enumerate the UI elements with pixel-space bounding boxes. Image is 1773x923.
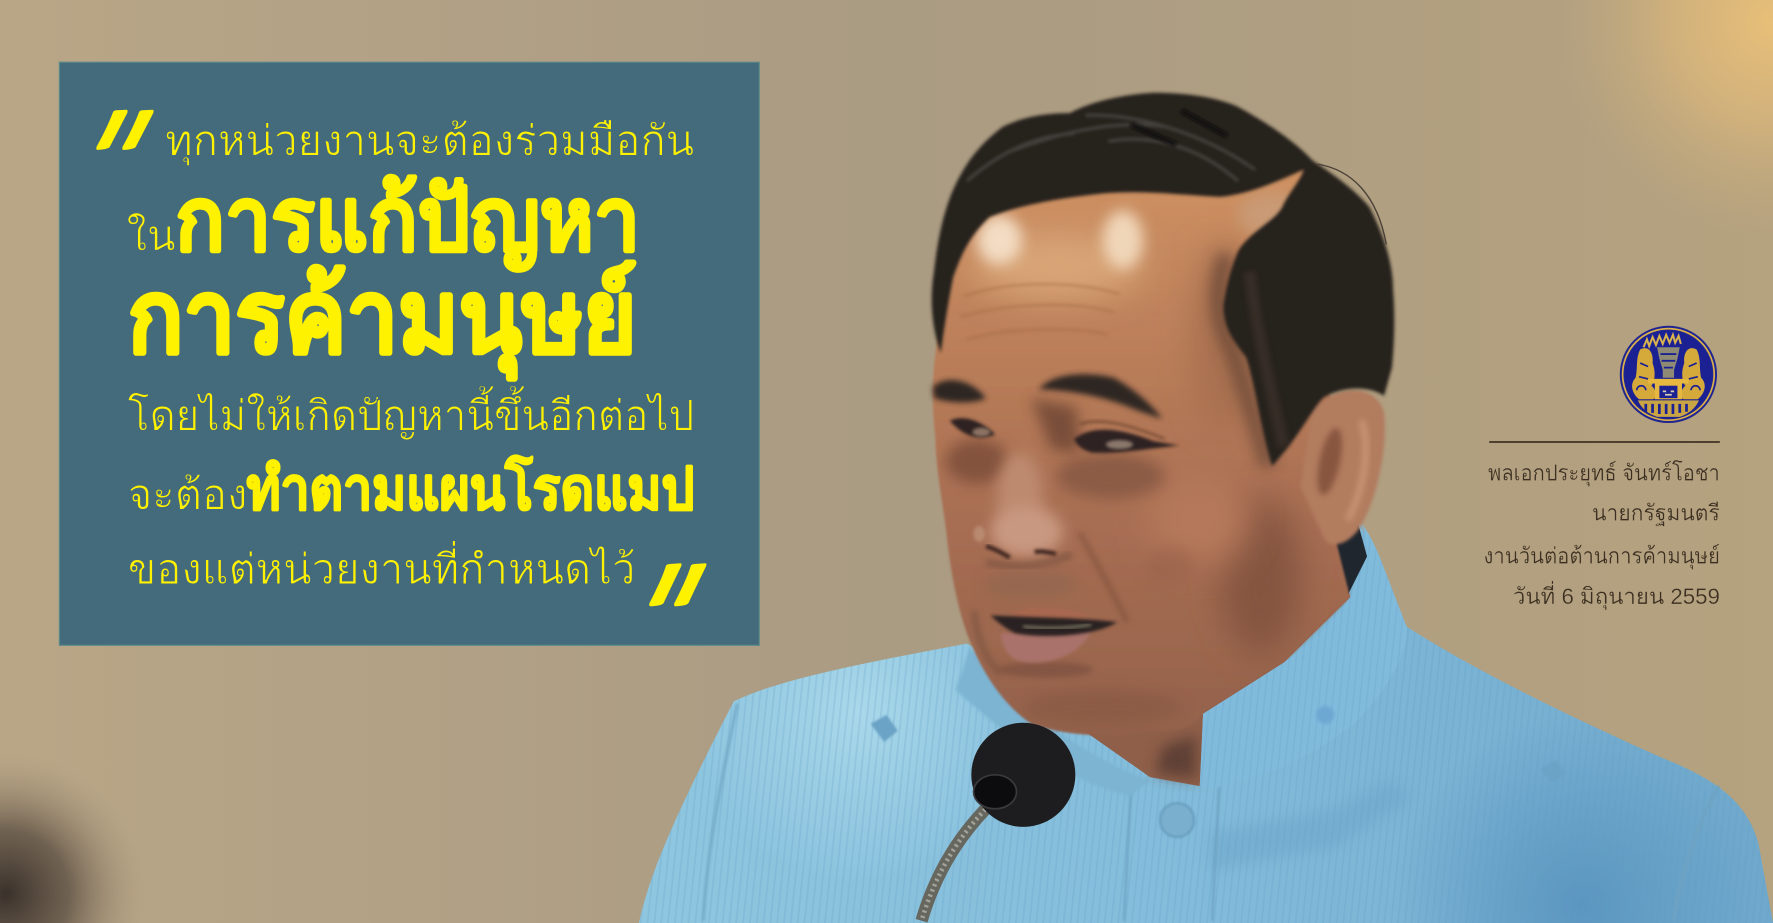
icon: government seal: [1620, 326, 1717, 423]
quote line 3: การค้ามนุษย์: [128, 260, 637, 380]
icon: opening quote mark: [96, 110, 154, 150]
neck: [1074, 532, 1350, 786]
quote line 4: โดยไม่ให้เกิดปัญหานี้ขึ้นอีกต่อไป: [128, 385, 694, 440]
speaker title: นายกรัฐมนตรี: [1592, 500, 1720, 526]
eyes: [950, 418, 1179, 453]
event date: วันที่ 6 มิถุนายน 2559: [1513, 580, 1720, 610]
quote line 5: จะต้อง: [128, 471, 247, 518]
collar dark lining: [1327, 519, 1367, 597]
face: [933, 164, 1350, 735]
seal: bottom inscription band: [1638, 400, 1699, 417]
hair: [932, 93, 1394, 466]
microphone: [922, 723, 1075, 921]
seal: right guardian lion: [1681, 348, 1705, 399]
seal: left guardian lion: [1632, 348, 1656, 399]
collar: [1200, 517, 1407, 788]
eyebrows: [933, 374, 1162, 419]
speaker name: พลเอกประยุทธ์ จันทร์โอชา: [1488, 460, 1720, 487]
quote line 6: ของแต่หน่วยงานที่กำหนดไว้: [128, 541, 635, 593]
nose: [974, 526, 1072, 566]
photo: speaker with microphone: [639, 93, 1773, 923]
event name: งานวันต่อต้านการค้ามนุษย์: [1484, 542, 1720, 569]
shirt: [639, 517, 1773, 923]
seal: central urn: [1657, 347, 1680, 378]
quote line 5: ทำตามแผนโรดแมป: [247, 454, 694, 522]
ear: [1300, 390, 1385, 544]
seal: base table: [1648, 379, 1689, 399]
panel: quote: [59, 62, 759, 645]
quote line 1: ทุกหน่วยงานจะต้องร่วมมือกัน: [165, 117, 694, 166]
mouth: [991, 608, 1117, 663]
quote line 2: ใน: [127, 212, 176, 259]
speaker caption: [1484, 460, 1720, 610]
divider under seal: [1489, 441, 1720, 443]
icon: closing quote mark: [649, 563, 706, 606]
seal: flame crown: [1644, 335, 1681, 347]
quote line 2: การแก้ปัญหา: [175, 170, 640, 273]
